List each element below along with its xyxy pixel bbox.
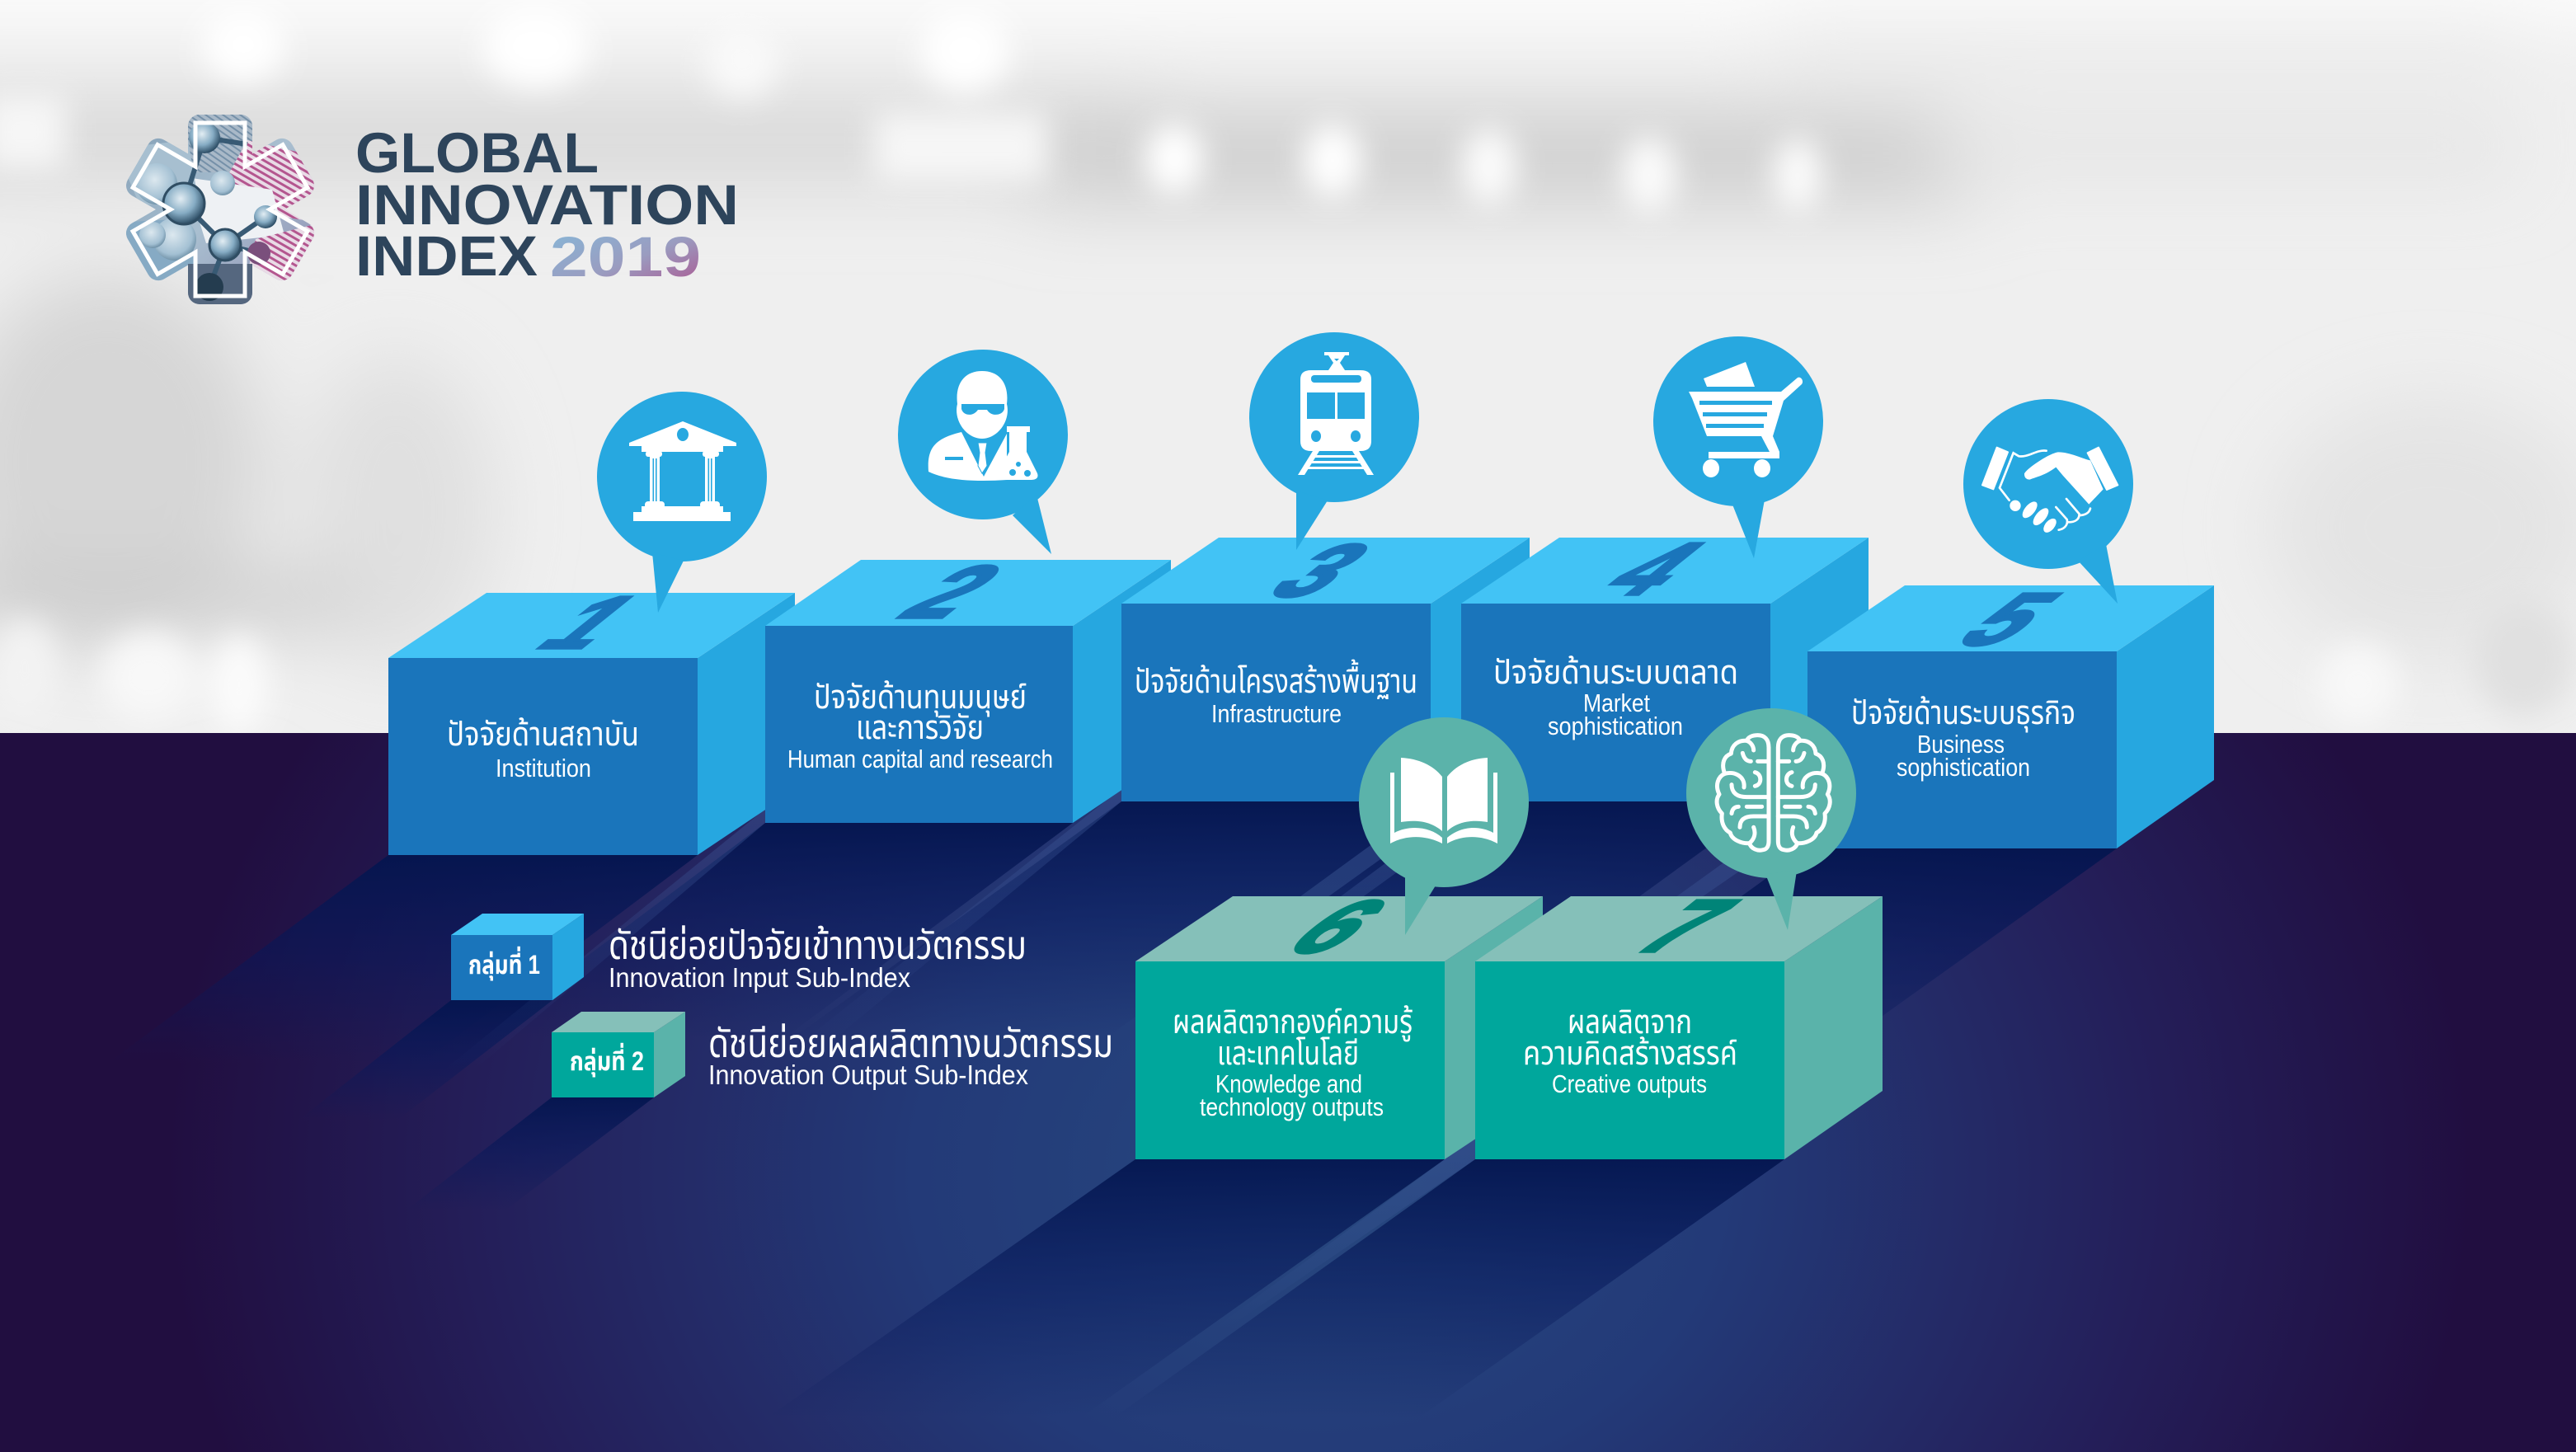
- box 3: infrastructure: [1121, 529, 1530, 801]
- label: institution: [447, 717, 639, 782]
- balloon 5: business icon: [1963, 399, 2133, 604]
- number 4: 4: [1577, 528, 1732, 610]
- label: market sophistication: [1493, 655, 1738, 740]
- title: Global Innovation Index 2019: [355, 121, 739, 289]
- label: infrastructure: ปัจจัยด้านโครงสร้างพื้นฐาน: [1135, 659, 1417, 700]
- icon: scientist with flask: [928, 371, 1038, 481]
- balloon 2: human capital icon: [898, 350, 1068, 554]
- label: knowledge and technology: และเทคโนโลยี: [1217, 1036, 1359, 1072]
- icon: handshake: [1982, 448, 2118, 535]
- balloon 7: creative icon: [1686, 708, 1856, 930]
- label: infrastructure: Infrastructure: [1211, 699, 1342, 728]
- title: Global Innovation Index 2019: INNOVATION: [355, 173, 739, 237]
- label: knowledge and technology: ผลผลิตจากองค์ความรู้: [1173, 1004, 1413, 1041]
- box 1: institution: [388, 581, 795, 855]
- number 2: 2: [875, 551, 1030, 633]
- box 4: market sophistication: [1461, 528, 1869, 801]
- label: business sophistication: Business: [1917, 730, 2005, 759]
- icon: open book: [1390, 758, 1497, 843]
- icon: train: [1298, 352, 1374, 475]
- icon: temple: [629, 421, 736, 521]
- title: Global Innovation Index 2019: 2019: [550, 225, 701, 289]
- label: creative outputs: [1523, 1004, 1737, 1098]
- label: creative outputs: Creative outputs: [1552, 1069, 1707, 1098]
- number 3: 3: [1243, 529, 1398, 612]
- legend text: innovation output sub-index: [708, 1022, 1113, 1090]
- legend box: group 1: กลุ่มที่ 1: [468, 946, 540, 980]
- label: institution: Institution: [496, 754, 591, 782]
- title: Global Innovation Index 2019: GLOBAL: [355, 121, 599, 185]
- legend box: group 2: กลุ่มที่ 2: [570, 1042, 644, 1077]
- label: human capital: และการวิจัย: [856, 710, 984, 746]
- background: blurred light bokeh: [0, 0, 2576, 734]
- number 6: 6: [1261, 886, 1416, 968]
- label: infrastructure: [1135, 659, 1417, 728]
- label: knowledge and technology: technology outputs: [1200, 1093, 1384, 1121]
- label: institution: ปัจจัยด้านสถาบัน: [447, 717, 639, 753]
- box 5: business sophistication: [1807, 578, 2214, 848]
- icon: shopping cart: [1689, 362, 1803, 477]
- box 2: human capital and research: [765, 551, 1171, 823]
- label: human capital: Human capital and research: [787, 745, 1053, 773]
- label: business sophistication: [1851, 695, 2075, 782]
- legend text: innovation output sub-index: Innovation Output Sub-Index: [708, 1060, 1028, 1090]
- box 6: knowledge and technology outputs: [1135, 886, 1543, 1159]
- balloon 3: infrastructure icon: [1249, 332, 1419, 550]
- label: human capital: ปัจจัยด้านทุนมนุษย์: [814, 679, 1027, 717]
- legend box: group 1: [451, 914, 584, 1000]
- label: creative outputs: ความคิดสร้างสรรค์: [1523, 1036, 1737, 1072]
- legend box: group 2: [552, 1012, 685, 1097]
- title: Global Innovation Index 2019: INDEX: [355, 224, 538, 288]
- balloon 6: knowledge icon: [1359, 717, 1529, 935]
- logo: star of life with molecule: [126, 115, 314, 304]
- icon: brain: [1717, 735, 1830, 850]
- background: dark floor: [0, 733, 2576, 1452]
- number 5: 5: [1932, 578, 2087, 660]
- number 1: 1: [513, 581, 668, 664]
- legend text: innovation output sub-index: ดัชนีย่อยผลผลิตทางนวัตกรรม: [708, 1022, 1113, 1066]
- label: market sophistication: sophistication: [1548, 712, 1683, 740]
- label: market sophistication: ปัจจัยด้านระบบตลาด: [1493, 655, 1738, 691]
- label: creative outputs: ผลผลิตจาก: [1568, 1004, 1692, 1041]
- label: human capital: [787, 679, 1053, 773]
- box 7: creative outputs: [1475, 885, 1883, 1159]
- legend text: innovation input sub-index: Innovation Input Sub-Index: [609, 962, 910, 993]
- label: business sophistication: ปัจจัยด้านระบบธุรกิจ: [1851, 695, 2075, 732]
- label: market sophistication: Market: [1583, 688, 1650, 717]
- legend text: innovation input sub-index: [609, 924, 1027, 993]
- number 7: 7: [1609, 885, 1764, 967]
- balloon 1: institution icon: [597, 392, 767, 613]
- legend text: innovation input sub-index: ดัชนีย่อยปัจจัยเข้าทางนวัตกรรม: [609, 924, 1027, 968]
- label: knowledge and technology: [1173, 1004, 1413, 1121]
- label: knowledge and technology: Knowledge and: [1215, 1069, 1362, 1098]
- floor shadows under the boxes: [107, 788, 2117, 1418]
- label: business sophistication: sophistication: [1897, 753, 2030, 782]
- balloon 4: market icon: [1653, 336, 1823, 558]
